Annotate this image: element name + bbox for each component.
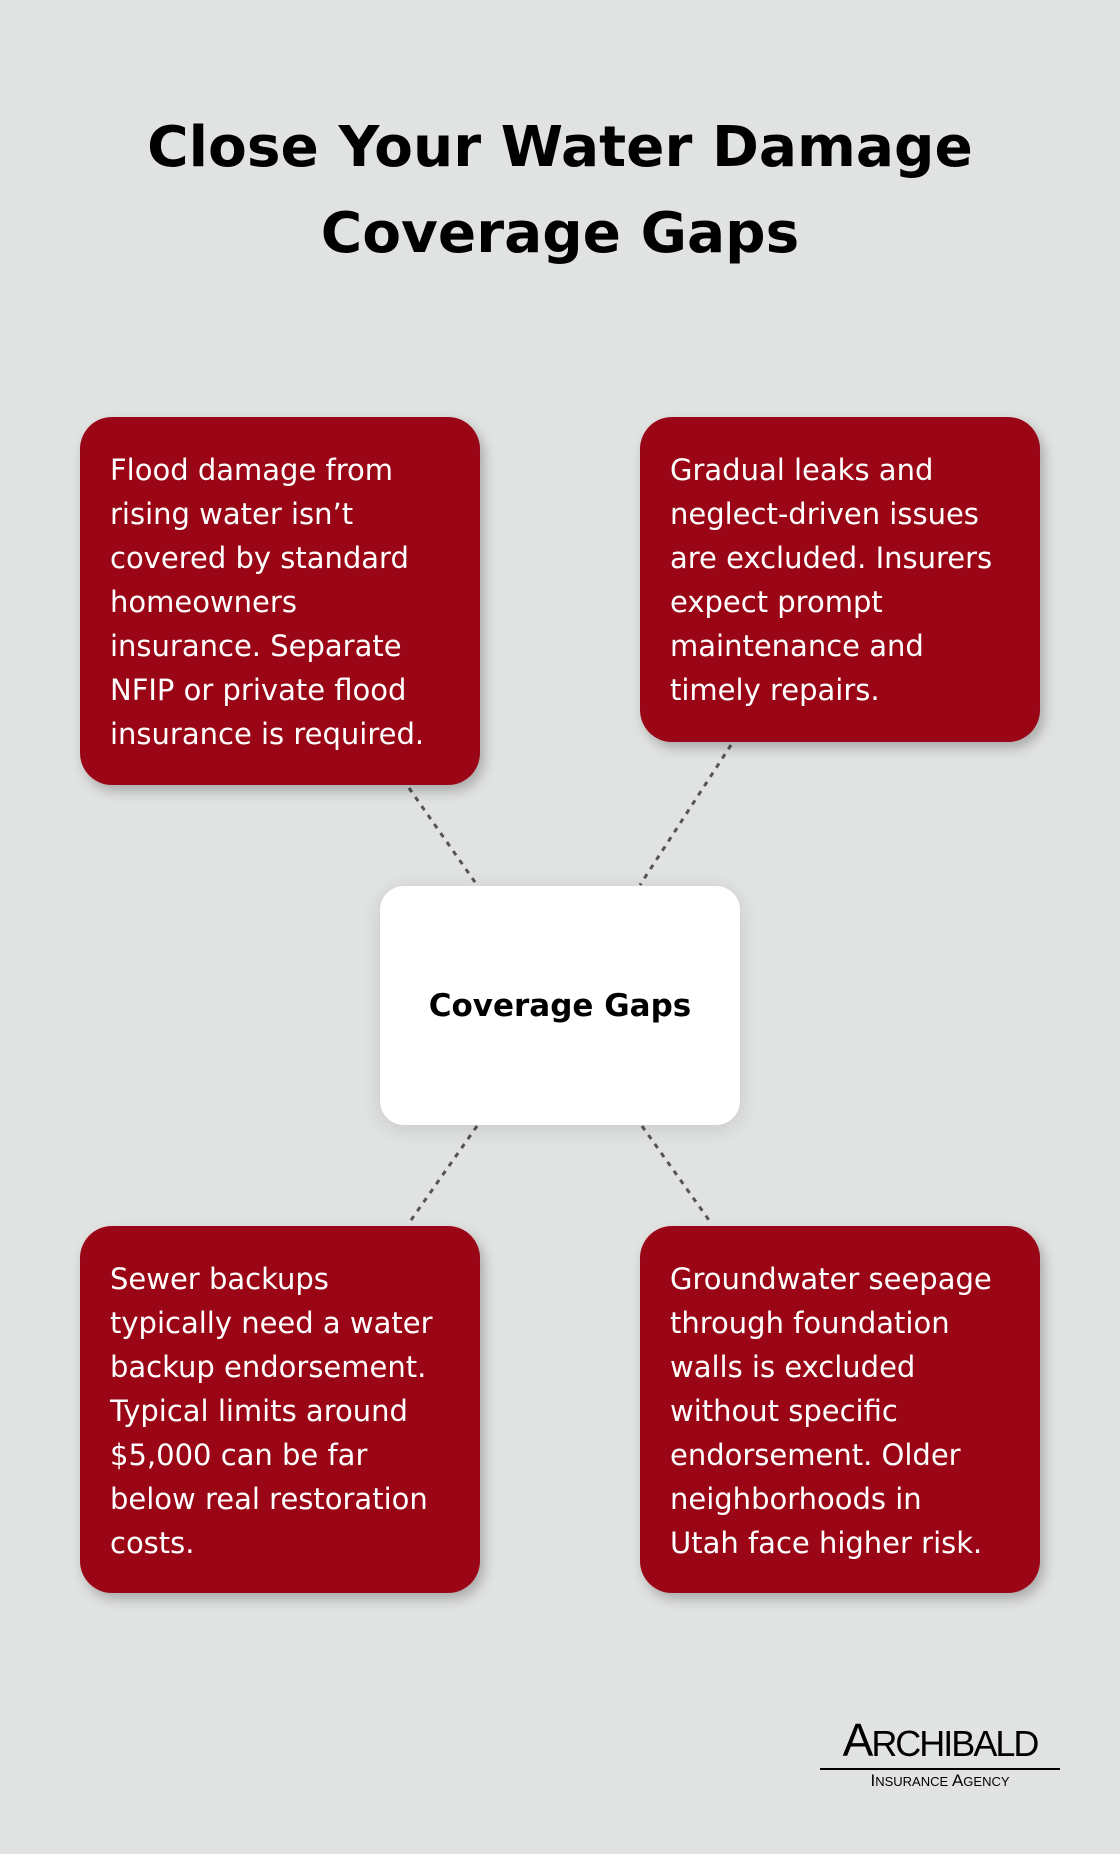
panel: flood: covered by standard <box>110 541 409 575</box>
title <box>147 115 973 266</box>
panel: gradual leaks <box>640 417 1040 742</box>
panel: groundwater: through foundation <box>670 1306 950 1340</box>
panel: groundwater <box>640 1226 1040 1593</box>
panel: flood: insurance. Separate <box>110 629 402 663</box>
panel: groundwater: endorsement. Older <box>670 1438 961 1472</box>
panel: sewer backups: costs. <box>110 1526 194 1560</box>
panel: sewer backups: below real restoration <box>110 1482 428 1516</box>
panel: flood <box>80 417 480 785</box>
panel: sewer backups: Sewer backups <box>110 1262 329 1296</box>
panel: flood: NFIP or private flood <box>110 673 406 707</box>
panel: sewer backups: typically need a water <box>110 1306 433 1340</box>
panel: flood: insurance is required. <box>110 717 424 751</box>
logo: INSURANCE AGENCY <box>870 1771 1010 1790</box>
logo: ARCHIBALD <box>843 1714 1037 1766</box>
panel: groundwater: neighborhoods in <box>670 1482 922 1516</box>
panel: flood: homeowners <box>110 585 297 619</box>
title: Coverage Gaps <box>321 201 799 266</box>
panel: sewer backups: Typical limits around <box>110 1394 408 1428</box>
center node: Coverage Gaps <box>429 988 691 1024</box>
panel: gradual leaks: maintenance and <box>670 629 924 663</box>
title: Close Your Water Damage <box>147 115 973 180</box>
panel: groundwater: without specific <box>670 1394 898 1428</box>
logo <box>820 1714 1060 1790</box>
panel: groundwater: Groundwater seepage <box>670 1262 992 1296</box>
panel: sewer backups <box>80 1226 480 1593</box>
center node <box>380 886 740 1125</box>
panel: groundwater: Utah face higher risk. <box>670 1526 982 1560</box>
panel: flood: rising water isn’t <box>110 497 353 531</box>
panel: gradual leaks: neglect-driven issues <box>670 497 979 531</box>
panel: gradual leaks: Gradual leaks and <box>670 453 933 487</box>
panel: flood: Flood damage from <box>110 453 393 487</box>
panel: sewer backups: $5,000 can be far <box>110 1438 367 1472</box>
panel: gradual leaks: expect prompt <box>670 585 883 619</box>
panel: sewer backups: backup endorsement. <box>110 1350 426 1384</box>
panel: groundwater: walls is excluded <box>670 1350 915 1384</box>
panel: gradual leaks: timely repairs. <box>670 673 880 707</box>
panel: gradual leaks: are excluded. Insurers <box>670 541 992 575</box>
